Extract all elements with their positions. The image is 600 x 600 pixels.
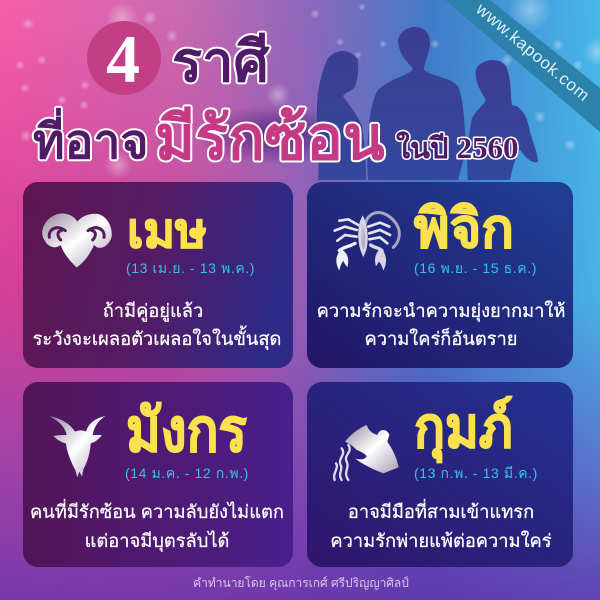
silhouettes of three people bbox=[317, 27, 538, 180]
sign name: มังกร bbox=[126, 397, 247, 464]
dates: (13 เม.ย. - 13 พ.ค.) bbox=[126, 260, 255, 276]
credit line: คำทำนายโดย คุณการเกศ์ ศรีปริญญาศิลป์ bbox=[193, 576, 409, 591]
dates: (16 พ.ย. - 15 ธ.ค.) bbox=[414, 260, 537, 276]
icon: scorpion bbox=[335, 213, 399, 271]
panel: Aries bbox=[23, 182, 293, 368]
panel: Aquarius bbox=[307, 382, 573, 567]
description: ถ้ามีคู่อยู่แล้ว bbox=[103, 300, 203, 322]
sign name: เมษ bbox=[127, 205, 207, 258]
description: อาจมีมือที่สามเข้าแทรก bbox=[348, 499, 534, 522]
icon: goat bbox=[49, 416, 105, 477]
icon: water jar bbox=[334, 425, 399, 480]
sign name: พิจิก bbox=[414, 199, 514, 259]
description: ความรักจะนำความยุ่งยากมาให้ bbox=[317, 300, 565, 323]
description: ระวังจะเผลอตัวเผลอใจในขั้นสุด bbox=[33, 325, 281, 351]
description: ความรักพ่ายแพ้ต่อความใคร่ bbox=[330, 530, 552, 551]
heading: มีรักซ้อน: มีรักซ้อน bbox=[155, 104, 385, 172]
dates: (13 ก.พ. - 13 มี.ค.) bbox=[414, 465, 538, 481]
description: แต่อาจมีบุตรลับได้ bbox=[85, 530, 229, 553]
heading: ราศี: ราศี bbox=[172, 30, 271, 93]
icon: ram bbox=[42, 213, 112, 267]
panel: Scorpio bbox=[307, 182, 573, 368]
heading: ที่อาจ: ที่อาจ bbox=[33, 107, 149, 169]
heading: ในปี 2560: ในปี 2560 bbox=[396, 130, 518, 165]
dates: (14 ม.ค. - 12 ก.พ.) bbox=[125, 465, 249, 481]
ribbon text: www.kapook.com bbox=[472, 0, 593, 105]
number badge bbox=[87, 21, 161, 97]
description: ความใคร่ก็อันตราย bbox=[364, 327, 518, 349]
panel: Capricorn bbox=[23, 382, 293, 567]
number badge: 4 bbox=[106, 21, 140, 97]
sign name: กุมภ์ bbox=[414, 395, 513, 464]
website ribbon bbox=[445, 0, 600, 132]
description: คนที่มีรักซ้อน ความลับยังไม่แตก bbox=[30, 499, 284, 522]
title bbox=[33, 21, 518, 172]
